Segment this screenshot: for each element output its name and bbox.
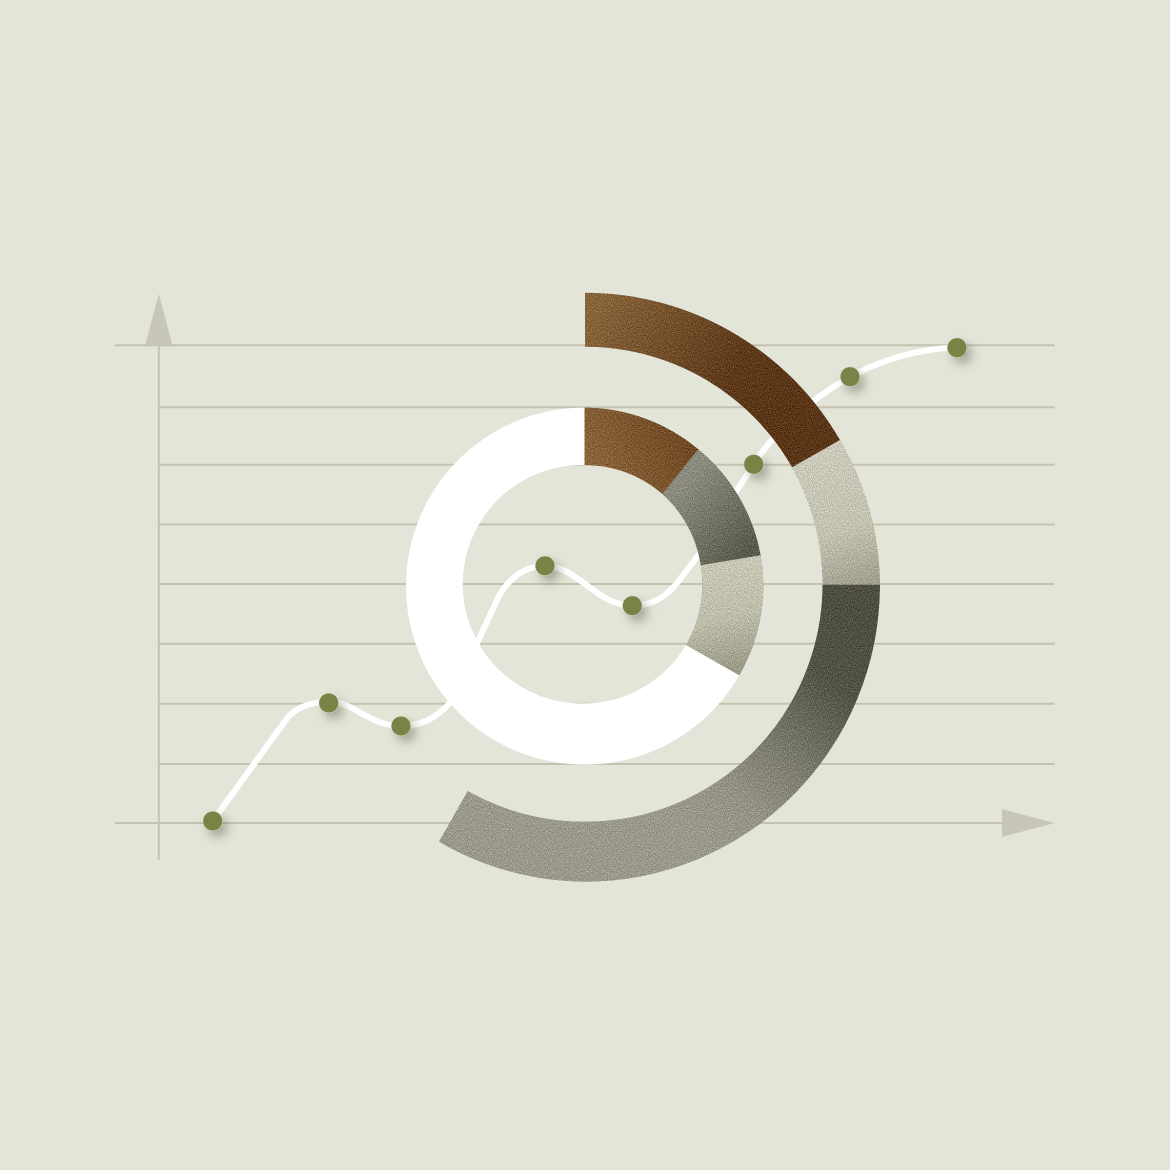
inner donut ring — [406, 408, 763, 765]
outer ring — [439, 293, 880, 882]
outer ring: light segment — [792, 440, 880, 585]
inner ring: dark grey segment — [662, 449, 761, 565]
data points — [203, 338, 967, 831]
y axis with arrow — [145, 294, 172, 860]
trend line — [213, 348, 957, 821]
chart grid lines — [115, 345, 1054, 823]
outer ring: brown segment — [585, 293, 840, 467]
inner ring: light grey segment — [686, 555, 763, 675]
outer ring: dark to grey segment — [439, 585, 880, 882]
inner ring: brown segment — [584, 408, 698, 494]
x axis arrow — [1002, 809, 1054, 837]
inner ring: white segment — [406, 408, 739, 765]
